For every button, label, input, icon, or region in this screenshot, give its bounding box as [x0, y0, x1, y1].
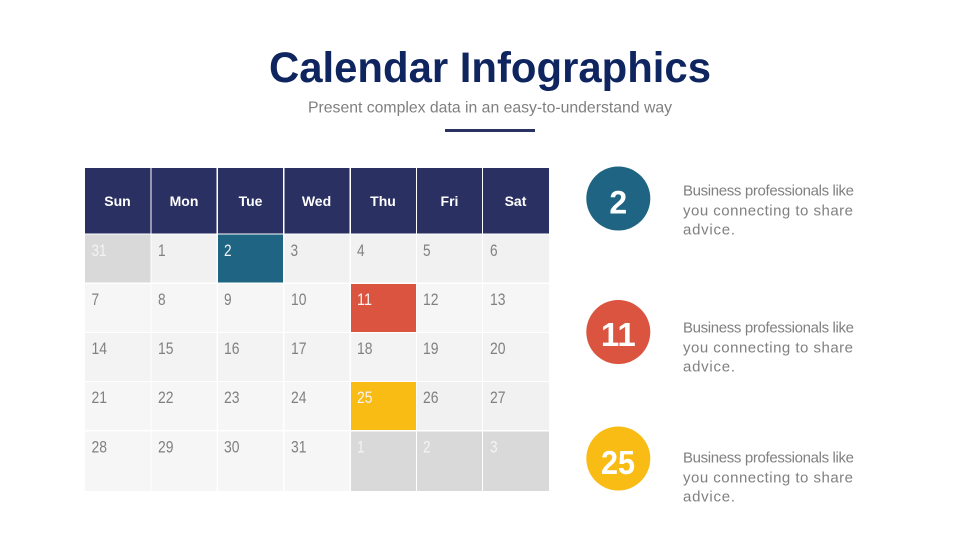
calendar day numbers: 27 [490, 388, 506, 407]
calendar header row: Tue [239, 193, 263, 209]
calendar day numbers: 12 [423, 290, 438, 309]
calendar day numbers: 31 [92, 241, 106, 260]
calendar day numbers: 2 [423, 438, 431, 456]
calendar day numbers: 11 [357, 290, 372, 309]
icon: circle 11: 11 [601, 316, 636, 353]
calendar day numbers: 3 [490, 438, 498, 456]
title underline [445, 129, 535, 132]
calendar day numbers: 22 [158, 388, 174, 407]
icon: circle 25 [586, 426, 650, 490]
icon: circle 2: 2 [609, 184, 627, 220]
calendar day numbers: 2 [224, 241, 232, 260]
description: day 11: advice. [683, 358, 735, 376]
icon: circle 25: 25 [601, 444, 635, 481]
calendar day numbers: 18 [357, 339, 372, 358]
calendar day numbers: 1 [357, 438, 365, 456]
description: day 2 [683, 182, 854, 238]
calendar day numbers: 21 [92, 388, 107, 407]
calendar day numbers: 17 [291, 339, 306, 358]
description: day 2: you connecting to share [683, 202, 853, 220]
calendar day numbers: 8 [158, 290, 166, 309]
calendar day numbers: 14 [92, 339, 107, 358]
calendar day numbers: 9 [224, 290, 232, 309]
calendar day numbers: 5 [423, 241, 431, 260]
calendar day numbers: 7 [92, 290, 99, 309]
calendar day numbers [92, 241, 506, 456]
calendar header row: Wed [302, 193, 331, 209]
callout: day 25 [586, 426, 854, 506]
description: day 25: you connecting to share [683, 470, 853, 486]
description: day 11: you connecting to share [683, 340, 853, 356]
calendar day numbers: 13 [490, 290, 506, 309]
description: day 2: advice. [683, 222, 735, 238]
description: day 25: advice. [683, 488, 735, 506]
calendar day numbers: 25 [357, 388, 372, 407]
calendar day numbers: 6 [490, 241, 498, 260]
calendar header row: Fri [441, 193, 458, 209]
description: day 11: Business professionals like [683, 320, 854, 336]
calendar day numbers: 20 [490, 339, 506, 358]
calendar day numbers: 15 [158, 339, 174, 358]
calendar day numbers: 24 [291, 388, 306, 407]
calendar day numbers: 29 [158, 438, 174, 456]
description: day 25: Business professionals like [683, 450, 854, 466]
calendar day numbers: 28 [92, 438, 107, 456]
description: day 2: Business professionals like [683, 182, 854, 200]
calendar day numbers: 10 [291, 290, 306, 309]
calendar [85, 168, 549, 491]
calendar day numbers: 3 [290, 241, 298, 260]
calendar header row: Mon [170, 193, 198, 209]
calendar day numbers: 31 [291, 438, 306, 456]
description: day 25 [683, 450, 854, 506]
calendar day numbers: 4 [357, 241, 365, 260]
calendar day numbers: 16 [224, 339, 240, 358]
calendar day numbers: 26 [423, 388, 438, 407]
calendar day numbers: 23 [224, 388, 240, 407]
description: day 11 [683, 320, 854, 376]
calendar day numbers: 19 [423, 339, 438, 358]
title: Calendar Infographics [269, 44, 711, 92]
calendar header row: Sat [505, 193, 527, 209]
icon: circle 11 [586, 300, 650, 364]
subtitle: Present complex data in an easy-to-understand way [308, 100, 672, 116]
calendar body cells [85, 234, 549, 491]
calendar header row: Sun [104, 193, 131, 209]
calendar header row: Thu [370, 193, 396, 209]
calendar day numbers: 30 [224, 438, 240, 456]
calendar day numbers: 1 [158, 241, 166, 260]
callout: day 2 [586, 166, 854, 238]
icon: circle 2 [586, 166, 650, 230]
callout: day 11 [586, 300, 854, 376]
calendar header row [85, 168, 549, 234]
